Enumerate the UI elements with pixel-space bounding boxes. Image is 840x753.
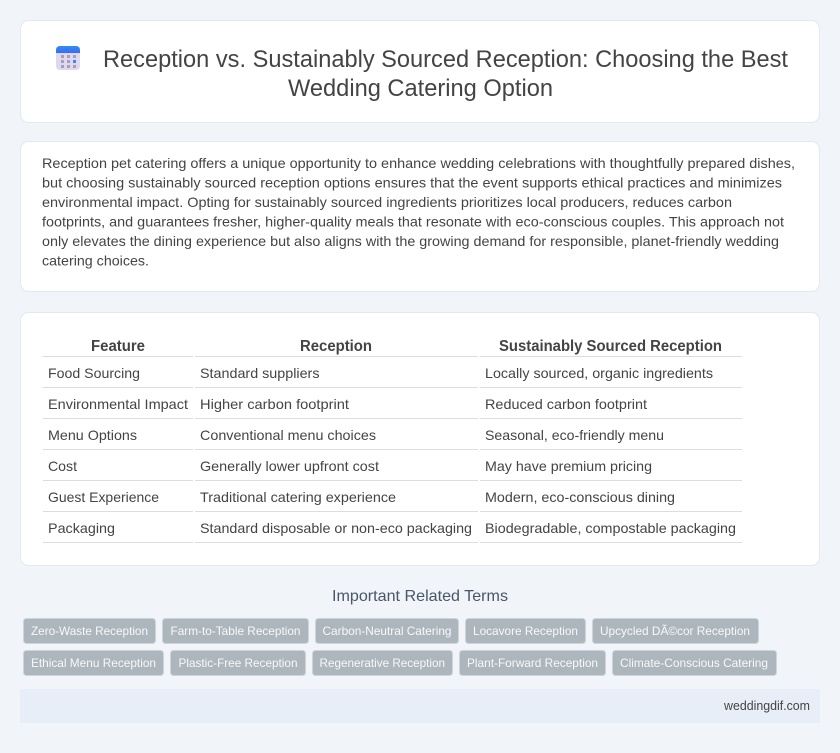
row: food sourcing [43, 365, 742, 388]
table header row: Feature [91, 338, 145, 355]
related term tags [24, 618, 776, 676]
table header row [43, 338, 742, 357]
tag: locavore reception: Locavore Reception [473, 624, 578, 638]
tag: zero-waste reception: Zero-Waste Reception [31, 624, 148, 638]
intro text: environmental impact. Opting for sustainably sourced ingredients prioritizes local producers, reduces carbon [42, 194, 732, 210]
title: Wedding Catering Option [288, 75, 553, 102]
intro text: but choosing sustainably sourced reception options ensures that the event supports ethical practices and minimizes [42, 174, 782, 190]
footer source text: weddingdif.com [723, 699, 810, 713]
tag: locavore reception [466, 618, 586, 644]
icon: calendar [56, 46, 80, 70]
tag: ethical menu reception [24, 650, 164, 676]
row: menu options [43, 427, 742, 450]
row: guest experience [43, 489, 742, 512]
row: food sourcing: Standard suppliers [200, 365, 320, 381]
tag: upcycled decor reception [592, 618, 758, 644]
row: packaging: Standard disposable or non-eco packaging [200, 520, 472, 536]
footer bar [20, 689, 820, 723]
row: guest experience: Modern, eco-conscious dining [485, 489, 675, 505]
intro text: only elevates the dining experience but also aligns with the growing demand for responsible, planet-friendly wedding [42, 233, 779, 249]
row: food sourcing: Locally sourced, organic ingredients [485, 365, 713, 381]
tag: carbon-neutral catering: Carbon-Neutral Catering [322, 624, 452, 638]
row: environmental impact: Environmental Impact [48, 396, 188, 412]
tag: farm-to-table reception [162, 618, 308, 644]
title: Reception vs. Sustainably Sourced Reception: Choosing the Best [103, 46, 788, 73]
intro text [42, 155, 795, 268]
tag: climate-conscious catering [612, 650, 776, 676]
tag: farm-to-table reception: Farm-to-Table Reception [170, 624, 300, 638]
table header row: Sustainably Sourced Reception [499, 338, 722, 355]
table header row: Reception [300, 338, 372, 355]
tag: climate-conscious catering: Climate-Conscious Catering [620, 656, 768, 670]
tag: upcycled decor reception: Upcycled DÃ©cor Reception [600, 624, 750, 638]
panel: introduction [20, 142, 820, 292]
row: cost [43, 458, 742, 481]
tag: regenerative reception [312, 650, 452, 676]
row: packaging: Packaging [48, 520, 115, 536]
tag: plant-forward reception: Plant-Forward Reception [467, 656, 598, 670]
row: packaging [43, 520, 742, 543]
row: cost: Cost [48, 458, 77, 474]
panel: comparison table [20, 312, 820, 566]
tag: plastic-free reception [170, 650, 306, 676]
tag: zero-waste reception [24, 618, 156, 644]
row: environmental impact: Reduced carbon footprint [485, 396, 647, 412]
row: packaging: Biodegradable, compostable packaging [485, 520, 736, 536]
row: cost: Generally lower upfront cost [200, 458, 379, 474]
row: cost: May have premium pricing [485, 458, 652, 474]
panel: header [20, 20, 820, 122]
heading: important related terms: Important Related Terms [332, 588, 508, 605]
title [103, 46, 788, 102]
tag: plastic-free reception: Plastic-Free Reception [178, 656, 298, 670]
intro text: Reception pet catering offers a unique opportunity to enhance wedding celebrations with thoughtfully prepared dishes, [42, 155, 795, 171]
row: environmental impact: Higher carbon footprint [200, 396, 349, 412]
tag: ethical menu reception: Ethical Menu Reception [31, 656, 156, 670]
row: guest experience: Traditional catering experience [200, 489, 396, 505]
row: menu options: Conventional menu choices [200, 427, 376, 443]
row: menu options: Menu Options [48, 427, 137, 443]
intro text: catering choices. [42, 252, 149, 268]
row: menu options: Seasonal, eco-friendly menu [485, 427, 664, 443]
intro text: footprints, and guarantees fresher, higher-quality meals that resonate with eco-conscious couples. This approach not [42, 214, 784, 230]
tag: plant-forward reception [460, 650, 606, 676]
row: food sourcing: Food Sourcing [48, 365, 140, 381]
tag: regenerative reception: Regenerative Reception [320, 656, 445, 670]
row: environmental impact [43, 396, 742, 419]
tag: carbon-neutral catering [316, 618, 458, 644]
row: guest experience: Guest Experience [48, 489, 159, 505]
